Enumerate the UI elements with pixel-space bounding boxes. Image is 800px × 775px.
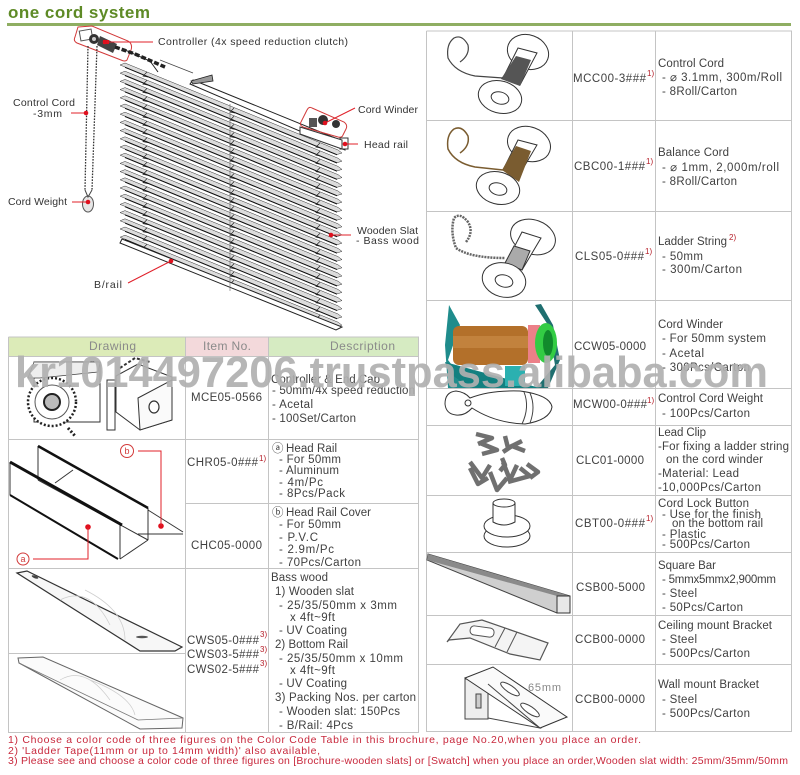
row: CWS item numbers: CWS05-0###: [187, 635, 260, 647]
row: ceiling bracket CCB00-0000: CCB00-0000: [575, 634, 645, 646]
row: CSB00-5000: Square Bar: [658, 560, 716, 572]
row: CCW05-0000: - For 50mm system: [662, 333, 766, 345]
row: CHC05-0000: - 2.9m/Pc: [279, 544, 334, 556]
row: CLC01-0000: on the cord winder: [666, 454, 763, 466]
row: CSB00-5000: [576, 560, 776, 614]
row: CHR05-0###: - For 50mm: [279, 454, 341, 466]
controller: [74, 26, 165, 67]
row: CSB00-5000: - Steel: [662, 588, 697, 600]
row: bass wood description: - UV Coating: [279, 625, 347, 637]
row: CWS item numbers: CWS03-5###: [187, 649, 260, 661]
row: CLS05-0###: [575, 233, 742, 276]
drawing: head rail and cover: [10, 444, 183, 565]
drawing: controller and end cap: [28, 358, 172, 437]
label: wooden slat: Wooden Slat: [357, 225, 418, 237]
row: CCW05-0000: Cord Winder: [658, 319, 723, 331]
panel: left parts table: [8, 337, 418, 732]
row: MCE05-0566: MCE05-0566: [191, 392, 262, 404]
row: CBC00-1###: [574, 147, 779, 188]
row: MCC00-3###: Control Cord: [658, 58, 724, 70]
row: CSB00-5000: - 5mmx5mmx2,900mm: [662, 574, 776, 586]
row: CBT00-0###: on the bottom rail: [672, 518, 763, 530]
table header: Item No.: [203, 339, 251, 353]
row: CBT00-0###: - 500Pcs/Carton: [662, 539, 750, 551]
head rail: [125, 50, 345, 150]
label: wooden slat: - Bass wood: [356, 235, 419, 247]
row: CWS item numbers: [187, 630, 267, 676]
row: ceiling bracket CCB00-0000: - 500Pcs/Carton: [662, 648, 750, 660]
row: CHC05-0000: - 70Pcs/Carton: [279, 557, 361, 569]
row: CHC05-0000: - P.V.C: [279, 532, 318, 544]
table header: Drawing: [89, 339, 136, 353]
row: CLC01-0000: [576, 427, 789, 494]
label: cord weight: Cord Weight: [8, 196, 67, 208]
row: CHC05-0000: [191, 506, 371, 569]
icon: control cord weight: [445, 391, 552, 424]
row: CWS item numbers: 3): [260, 630, 267, 639]
row: bass wood description: - UV Coating: [279, 678, 347, 690]
label: cord winder: Cord Winder: [358, 104, 418, 116]
row: CLC01-0000: -For fixing a ladder string: [658, 441, 789, 453]
row: CSB00-5000: CSB00-5000: [576, 582, 645, 594]
row: MCC00-3###: 1): [647, 69, 654, 78]
row: CBT00-0###: - Use for the finish: [662, 509, 761, 521]
callout b: b: [124, 446, 130, 456]
row: CSB00-5000: - 50Pcs/Carton: [662, 602, 743, 614]
panel: right parts table: [426, 29, 792, 732]
label: controller: Controller (4x speed reduction clutch): [158, 36, 348, 48]
row: MCC00-3###: - ⌀ 3.1mm, 300m/Roll: [662, 72, 782, 84]
label: head rail: [343, 139, 408, 151]
row: CHC05-0000: CHC05-0000: [191, 540, 262, 552]
icon: balance cord spool: [448, 121, 555, 209]
row: ceiling bracket CCB00-0000: - Steel: [662, 634, 697, 646]
row: CLC01-0000: -10,000Pcs/Carton: [658, 482, 761, 494]
icon: cord lock button: [484, 499, 530, 547]
row: CHR05-0###: ⓐ: [272, 442, 284, 455]
row: CHR05-0###: Head Rail: [286, 443, 337, 455]
label: control cord: Control Cord: [13, 97, 75, 109]
cord winder detail: [300, 107, 348, 149]
table header: [8, 337, 418, 356]
row: MCE05-0566: - 50mm/4x speed reduction: [272, 385, 415, 397]
row: CCW05-0000: [574, 319, 766, 374]
row: MCE05-0566: Controller & End Cap: [271, 374, 380, 386]
callout b: [120, 444, 164, 529]
row: MCW00-0###: [573, 393, 764, 420]
icon: cord winder: [445, 304, 560, 388]
row: bass wood description: [271, 572, 416, 732]
footnotes: 1) Choose a color code of three figures on the Color Code Table in this brochure, page No.20,when you place an order.: [8, 734, 641, 746]
row: CBT00-0###: CBT00-0###: [575, 518, 646, 530]
row: bass wood description: 2) Bottom Rail: [275, 639, 348, 651]
row: CHR05-0###: - 8Pcs/Pack: [279, 488, 345, 500]
label: control cord: [13, 97, 88, 120]
row: MCW00-0###: - 100Pcs/Carton: [662, 408, 750, 420]
row: CLS05-0###: - 50mm: [662, 251, 703, 263]
title: [7, 3, 791, 26]
row: CLS05-0###: 1): [645, 247, 652, 256]
callout a: [17, 524, 91, 565]
drawing: wooden slat: [17, 571, 182, 651]
row: CWS item numbers: CWS02-5###: [187, 664, 260, 676]
icon: control cord spool: [448, 29, 554, 118]
row: CBC00-1###: - ⌀ 1mm, 2,000m/roll: [662, 162, 779, 174]
icon: wall mount bracket: 65mm: [528, 682, 561, 694]
row: CCW05-0000: CCW05-0000: [574, 341, 646, 353]
row: CHC05-0000: Head Rail Cover: [286, 507, 371, 519]
row: CHR05-0###: - Aluminum: [279, 465, 339, 477]
row: CBC00-1###: CBC00-1###: [574, 161, 646, 173]
slats: [120, 63, 342, 330]
row: MCE05-0566: - 100Set/Carton: [272, 413, 356, 425]
row: CWS item numbers: 3): [260, 645, 267, 654]
row: wall bracket CCB00-0000: - Steel: [662, 694, 697, 706]
row: MCW00-0###: 1): [647, 396, 654, 405]
row: CHR05-0###: [187, 442, 345, 500]
title: one cord system: [8, 3, 150, 22]
row: CLS05-0###: Ladder String: [658, 236, 727, 248]
row: wall bracket CCB00-0000: - 500Pcs/Carton: [662, 708, 750, 720]
callout a: a: [20, 554, 26, 564]
row: bass wood description: Bass wood: [271, 572, 328, 584]
row: CHR05-0###: 1): [259, 454, 266, 463]
row: CCW05-0000: - Acetal: [662, 348, 704, 360]
row: CLS05-0###: 2): [729, 233, 736, 242]
row: CBC00-1###: - 8Roll/Carton: [662, 176, 737, 188]
row: CCW05-0000: - 300Pcs/Carton: [662, 362, 750, 374]
row: CWS item numbers: 3): [260, 659, 267, 668]
row: MCC00-3###: [573, 58, 782, 98]
row: CHR05-0###: - 4m/Pc: [279, 477, 323, 489]
footnotes: 2) 'Ladder Tape(11mm or up to 14mm width)' also available,: [8, 745, 320, 757]
row: CLS05-0###: CLS05-0###: [575, 251, 645, 263]
table header: Description: [330, 339, 395, 353]
row: CLC01-0000: Lead Clip: [658, 427, 706, 439]
label: head rail: Head rail: [364, 139, 408, 151]
row: CBC00-1###: Balance Cord: [658, 147, 729, 159]
control cord: [85, 46, 97, 190]
row: CBC00-1###: 1): [646, 157, 653, 166]
row: MCC00-3###: MCC00-3###: [573, 73, 647, 85]
row: bass wood description: - 25/35/50mm x 3mm: [279, 600, 397, 612]
icon: ceiling mount bracket: [447, 620, 548, 660]
label: cord winder: [323, 104, 418, 125]
watermark: kr1014497206.trustpass.alibaba.com: [15, 348, 768, 397]
row: ceiling bracket CCB00-0000: [575, 620, 773, 660]
footnotes: [8, 734, 788, 767]
row: MCE05-0566: [191, 374, 415, 425]
row: CBT00-0###: 1): [646, 514, 653, 523]
row: CHC05-0000: - For 50mm: [279, 519, 341, 531]
row: wall bracket CCB00-0000: Wall mount Bracket: [658, 679, 760, 691]
row: bass wood description: - B/Rail: 4Pcs: [279, 720, 353, 732]
footnotes: 3) Please see and choose a color code of three figures on [Brochure-wooden slats] or [Swatch] when you place an order,Wooden slat width: 25mm/35mm/50mm: [8, 755, 788, 767]
icon: square bar: [427, 554, 570, 613]
row: bass wood description: x 4ft~9ft: [290, 665, 336, 677]
row: ceiling bracket CCB00-0000: Ceiling mount Bracket: [658, 620, 773, 632]
row: CLS05-0###: - 300m/Carton: [662, 264, 742, 276]
cord weight: [82, 190, 94, 212]
row: CLC01-0000: -Material: Lead: [658, 468, 739, 480]
row: MCW00-0###: MCW00-0###: [573, 399, 648, 411]
row: CBT00-0###: [575, 498, 763, 551]
row: bass wood description: - Wooden slat: 150Pcs: [279, 706, 400, 718]
label: wooden slat: [329, 225, 419, 247]
row: MCC00-3###: - 8Roll/Carton: [662, 86, 737, 98]
row: MCE05-0566: - Acetal: [272, 399, 313, 411]
row: bass wood description: x 4ft~9ft: [290, 612, 336, 624]
label: bottom rail: [94, 259, 173, 291]
icon: ladder string spool: [452, 213, 560, 302]
row: MCW00-0###: Control Cord Weight: [658, 393, 764, 405]
row: wall bracket CCB00-0000: [575, 679, 760, 720]
label: control cord: -3mm: [33, 108, 62, 120]
row: CLC01-0000: CLC01-0000: [576, 455, 644, 467]
icon: lead clips: [470, 434, 538, 490]
row: CBT00-0###: Cord Lock Button: [658, 498, 749, 510]
row: CHC05-0000: ⓑ: [272, 506, 284, 519]
row: wall bracket CCB00-0000: CCB00-0000: [575, 694, 645, 706]
row: CHR05-0###: CHR05-0###: [187, 457, 259, 469]
drawing: bottom rail: [18, 657, 183, 729]
row: bass wood description: 1) Wooden slat: [275, 586, 355, 598]
row: CBT00-0###: - Plastic: [662, 529, 706, 541]
panel: blind diagram: [8, 26, 419, 330]
row: bass wood description: 3) Packing Nos. per carton: [275, 692, 416, 704]
label: bottom rail: B/rail: [94, 279, 122, 291]
icon: wall mount bracket: [465, 667, 567, 728]
row: bass wood description: - 25/35/50mm x 10mm: [279, 653, 403, 665]
